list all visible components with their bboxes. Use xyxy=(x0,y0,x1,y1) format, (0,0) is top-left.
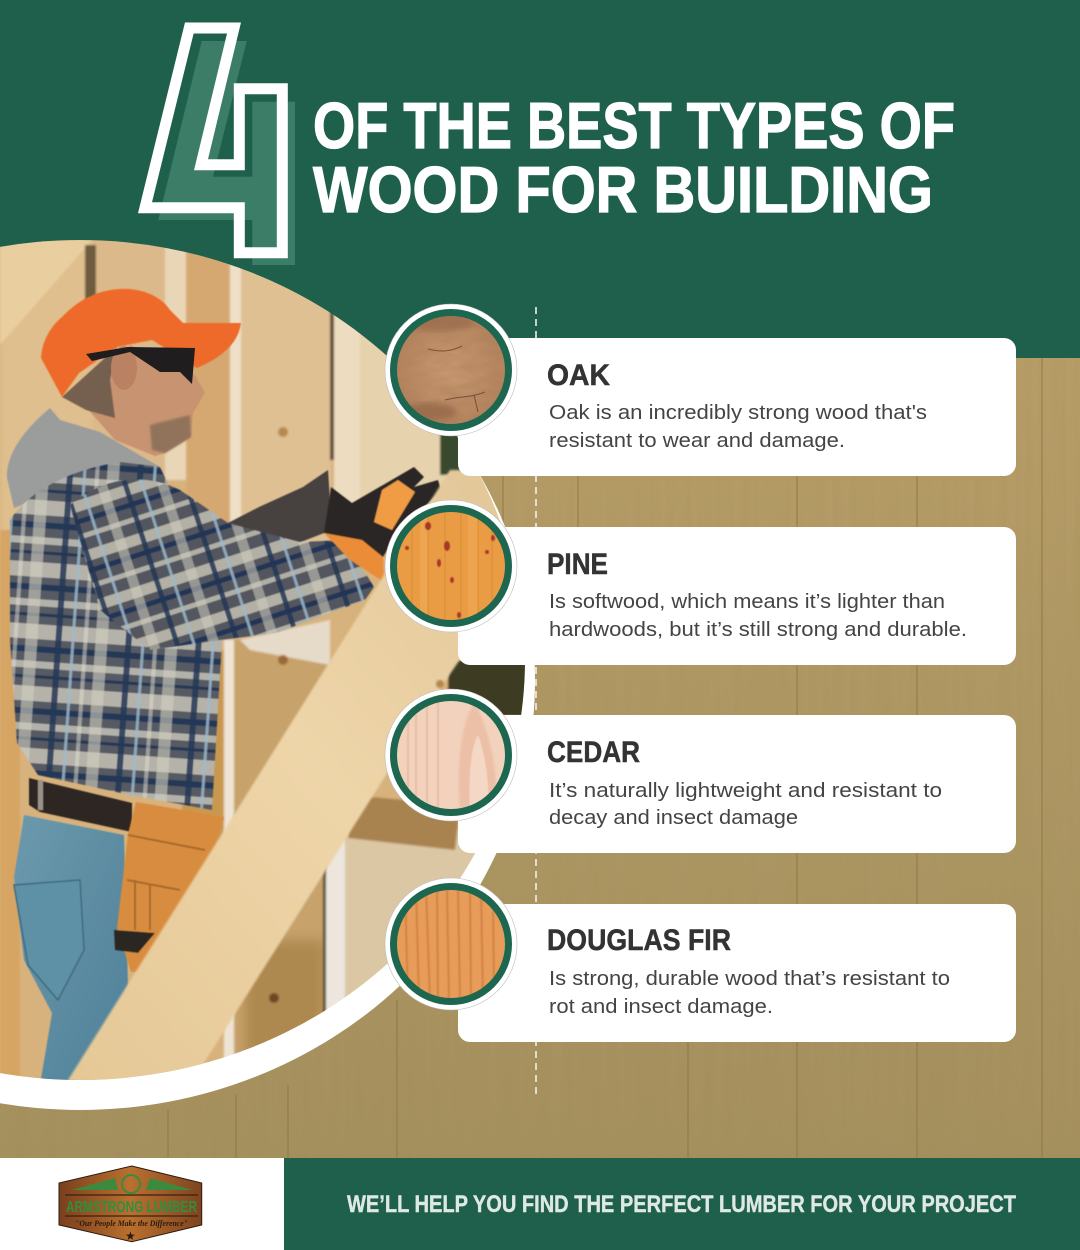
green header band xyxy=(0,0,1080,358)
belt xyxy=(29,778,132,832)
icon: oak sample xyxy=(385,304,517,436)
footer band xyxy=(284,1158,1080,1250)
card: pine: Is softwood, which means it’s lighter than xyxy=(549,591,945,613)
card: pine: hardwoods, but it’s still strong and durable. xyxy=(549,619,967,641)
ear xyxy=(111,346,137,390)
diagonal beam xyxy=(66,468,500,1080)
tool pouch xyxy=(114,802,224,972)
plaid shirt body xyxy=(10,462,228,810)
icon: cedar sample xyxy=(385,689,517,821)
hoodie xyxy=(7,408,160,508)
wood plank background xyxy=(0,340,1080,1170)
jeans pocket xyxy=(14,880,84,1000)
dashed timeline xyxy=(535,307,537,1095)
numeral shadow xyxy=(158,41,295,265)
beard xyxy=(150,415,191,453)
card: cedar: It’s naturally lightweight and resistant to xyxy=(549,780,942,802)
card: pine: PINE xyxy=(547,548,608,581)
sunglasses xyxy=(86,347,195,384)
logo: ★ xyxy=(125,1229,136,1243)
photo: builder holding lumber xyxy=(0,240,525,1080)
neck and face xyxy=(86,345,205,456)
title: WOOD FOR BUILDING xyxy=(313,153,933,226)
card: cedar: CEDAR xyxy=(547,736,640,769)
card: cedar xyxy=(458,715,1016,853)
far arm xyxy=(228,470,332,548)
title xyxy=(313,89,955,226)
card: douglas fir: rot and insect damage. xyxy=(549,996,773,1018)
glove xyxy=(324,467,441,582)
card: oak: resistant to wear and damage. xyxy=(549,430,845,452)
card: oak: OAK xyxy=(547,359,610,392)
logo: ARMSTRONG LUMBER xyxy=(66,1199,197,1216)
logo xyxy=(59,1166,202,1243)
logo: "Our People Make the Difference" xyxy=(75,1219,188,1228)
wall studs xyxy=(0,230,550,1090)
card: douglas fir: Is strong, durable wood that’s resistant to xyxy=(549,968,950,990)
title: OF THE BEST TYPES OF xyxy=(313,89,955,162)
card: cedar: decay and insect damage xyxy=(549,807,798,829)
4 numeral xyxy=(145,28,295,265)
icon: pine sample xyxy=(385,500,517,632)
card: oak xyxy=(458,338,1016,476)
jeans xyxy=(14,815,128,1085)
card: douglas fir xyxy=(458,904,1016,1042)
card: douglas fir: DOUGLAS FIR xyxy=(547,924,731,957)
hair xyxy=(62,347,117,418)
icon: douglas fir sample xyxy=(385,878,517,1010)
white ring behind photo xyxy=(0,250,535,1110)
footer xyxy=(0,1158,1080,1250)
orange cap xyxy=(41,289,241,397)
card: pine xyxy=(458,527,1016,665)
plaid near arm xyxy=(70,479,374,650)
logo background xyxy=(0,1158,284,1250)
card: oak: Oak is an incredibly strong wood that's xyxy=(549,402,927,424)
beam knot xyxy=(436,680,444,688)
numeral outline xyxy=(145,28,282,253)
